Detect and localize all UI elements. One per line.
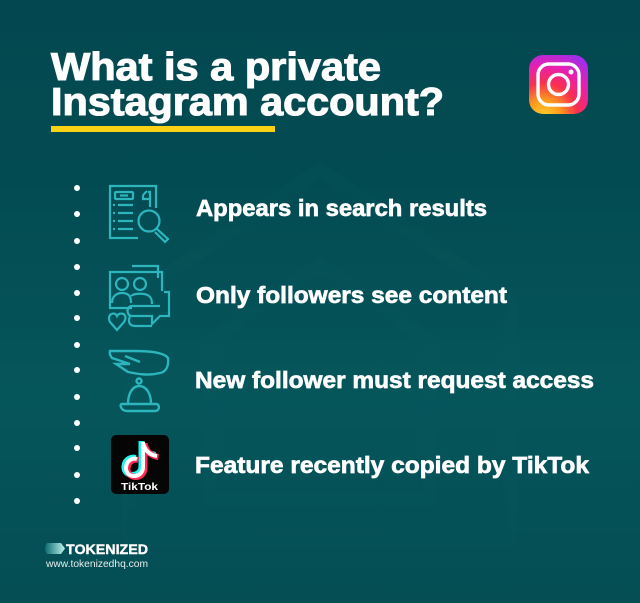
- icon: search results document: [110, 186, 168, 242]
- item text: Appears in search results: Appears in search results: [196, 195, 487, 221]
- dotted vertical line: [74, 185, 80, 504]
- title: Instagram account?: [51, 81, 444, 124]
- brand footer: www.tokenizedhq.com: [45, 558, 148, 570]
- icon: followers and chat: [109, 266, 169, 330]
- icon: TikTok logo: TikTok: [121, 481, 158, 493]
- icon: Instagram logo: [529, 55, 588, 114]
- brand footer: TOKENIZED: [66, 541, 148, 557]
- item text: Feature recently copied by TikTok: Feature recently copied by TikTok: [195, 452, 590, 478]
- icon: hand over service bell: [110, 351, 168, 411]
- icon: TikTok logo: [111, 435, 169, 494]
- item text: Only followers see content: Only followers see content: [196, 282, 507, 308]
- brand footer: [45, 541, 148, 570]
- title underline: [51, 126, 275, 132]
- title: What is a private: [51, 46, 381, 89]
- title: [51, 46, 444, 124]
- icon: Tokenized logo mark: [45, 543, 65, 554]
- item text: New follower must request access: New follower must request access: [195, 367, 594, 393]
